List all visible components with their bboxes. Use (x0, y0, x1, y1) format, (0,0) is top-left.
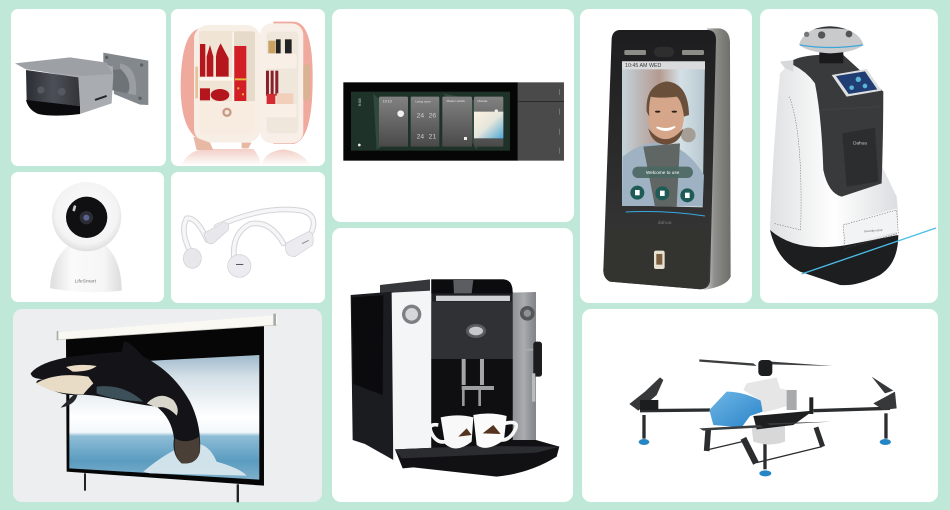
panel: face recognition terminal (580, 9, 752, 303)
arms and rods (640, 408, 890, 469)
icon: smart control panel: 26 (429, 112, 436, 119)
icon: smart control panel: 24 (417, 112, 424, 119)
panel: projector screen with orca (13, 309, 322, 502)
red bottles (200, 43, 246, 101)
icon: white open-ear headphones (183, 209, 314, 277)
icon: smart control panel: 24 (417, 134, 424, 141)
icon: crop spraying drone (629, 359, 897, 476)
icon: smart control panel: 10:10 (383, 100, 392, 104)
icon: access control terminal: 10:45 AM WED (625, 63, 662, 69)
panel: wall touch control panel (332, 9, 574, 222)
icon: patrol robot (770, 26, 936, 285)
icon: panoramic bullet camera (15, 53, 148, 116)
icon: patrol robot: Security robot (864, 228, 883, 233)
panel: bone conduction headphones (171, 172, 325, 303)
icon: espresso machine (351, 279, 560, 477)
panel: bullet camera (11, 9, 166, 166)
icon: smart control panel: 9:58 (357, 98, 362, 106)
icon: access control terminal: dahua (658, 220, 672, 226)
panel: beauty mini fridge (171, 9, 325, 166)
photo: smiling man (622, 81, 704, 207)
icon: smart control panel: Master switch (447, 99, 465, 103)
icon: access control terminal: Welcome to use (646, 170, 680, 175)
icon: projection screen (31, 314, 277, 502)
cups (430, 425, 445, 442)
panel: agricultural spray drone (582, 309, 938, 502)
icon: smart control panel: Climate (477, 99, 488, 103)
landing gear (707, 427, 823, 463)
icon: smart control panel: 21 (429, 134, 436, 141)
door (273, 22, 313, 144)
reflection (182, 149, 311, 166)
icon: white pan-tilt camera (50, 182, 122, 292)
icon: access control terminal (603, 28, 731, 290)
panel: security patrol robot (760, 9, 938, 303)
icon: patrol robot: Dahua (853, 141, 867, 146)
icon: smart control panel (343, 82, 564, 161)
panel: coffee machine (332, 228, 573, 502)
panel: indoor dome camera (11, 172, 164, 302)
icon: smart control panel: Living room (415, 99, 431, 103)
icon: pink cosmetics fridge (181, 22, 313, 166)
tray (395, 440, 559, 477)
icon: white pan-tilt camera: LifeSmart (75, 279, 97, 285)
orca (31, 341, 200, 464)
